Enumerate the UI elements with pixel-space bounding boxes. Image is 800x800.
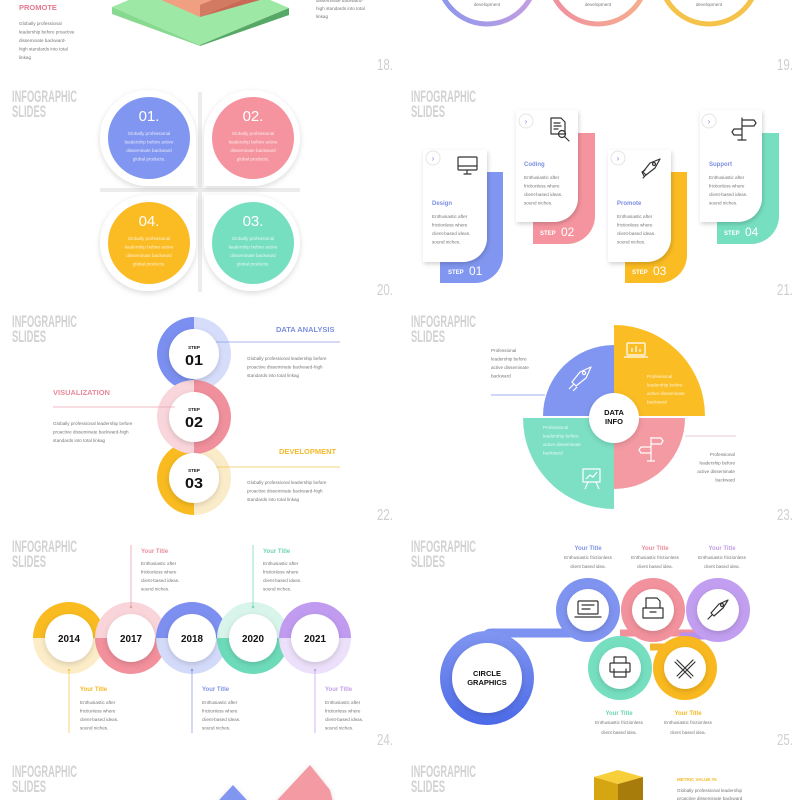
quadrant yellow: Professional — [647, 374, 672, 379]
title — [411, 312, 476, 346]
step card 03: client-based ideas. — [617, 231, 655, 236]
callout right — [685, 436, 736, 482]
step card 02: Enthusiastic after — [524, 175, 560, 180]
callout 2018: sound niches. — [202, 726, 230, 730]
title: SLIDES — [12, 102, 46, 121]
title: INFOGRAPHIC — [12, 762, 77, 781]
callout 2021: sound niches. — [325, 726, 353, 730]
slide 22 — [12, 312, 393, 524]
labels top: Your Title — [708, 546, 736, 552]
quadrant pink — [614, 418, 685, 489]
text block: promote body: disseminate backward- — [19, 38, 66, 43]
callout 2018: Enthusiastic after — [202, 700, 238, 705]
step card 01: Enthusiastic after — [432, 214, 468, 219]
slide 25 — [411, 537, 793, 749]
callout 2014: frictionless where — [80, 708, 116, 714]
title: SLIDES — [411, 327, 445, 346]
step card 03: 03 — [653, 264, 667, 278]
ring 03 — [157, 441, 231, 515]
petal 04: Globally professional — [128, 236, 170, 241]
slide number: 20. — [377, 282, 393, 299]
step card 03: sound niches. — [617, 240, 645, 244]
text block: promote body: Globally professional — [19, 21, 62, 26]
callout 2018 — [191, 669, 240, 733]
slide number: 24. — [377, 732, 393, 749]
slide number: 25. — [777, 732, 793, 749]
slide number: 22. — [377, 507, 393, 524]
ring 01 — [157, 317, 231, 391]
chart: step rings: 03 — [185, 475, 203, 492]
petal 02: 02. — [243, 108, 263, 125]
chart: year rings — [33, 602, 351, 674]
callout 2021: frictionless where — [325, 708, 361, 714]
slide 19 remnant — [438, 0, 793, 74]
callout 2017: Enthusiastic after — [141, 561, 177, 566]
chart: four petals — [100, 90, 300, 292]
callout 2021: client-based ideas. — [325, 717, 363, 722]
step card 02: STEP — [540, 231, 556, 237]
title: INFOGRAPHIC — [411, 87, 476, 106]
labels top: client based idea. — [570, 564, 606, 569]
step card 02: client-based ideas. — [524, 192, 562, 197]
chart: triangles — [210, 765, 335, 800]
text: metric value: METRIC VALUE #5 — [677, 777, 717, 782]
step card 03: Enthusiastic after — [617, 214, 653, 219]
quadrant yellow: leadership before — [647, 382, 683, 388]
petal 02 — [204, 90, 300, 186]
chart: step rings: STEP — [188, 468, 200, 473]
petal 01: 01. — [139, 108, 159, 125]
callout: data analysis: Globally professional leadership before — [247, 356, 327, 361]
chart: year rings: 2017 — [120, 634, 142, 645]
title — [12, 762, 77, 796]
callout 2020: Enthusiastic after — [263, 561, 299, 566]
text block: right: linkag — [316, 14, 328, 19]
petal 04: leadership before active — [125, 244, 174, 250]
step card 02: 02 — [561, 225, 575, 239]
labels top: Your Title — [641, 546, 669, 552]
title — [411, 87, 476, 121]
text: metric value: Globally professional leadership — [677, 788, 743, 793]
petal 01: global products. — [133, 156, 165, 162]
callout 2017 — [130, 545, 179, 608]
step card 01: 01 — [469, 264, 483, 278]
callout: visualization: proactive disseminate backward-high — [53, 430, 129, 434]
chart: pyramid base — [112, 0, 289, 46]
big circle — [440, 631, 534, 725]
slide 18 remnant — [19, 0, 393, 74]
step card 02: › — [525, 117, 528, 126]
callout: visualization: standards into total linkag — [53, 438, 106, 443]
callout: development: Globally professional leadership before — [247, 480, 327, 485]
title: SLIDES — [12, 552, 46, 571]
callout right: leadership before — [700, 460, 735, 466]
callout: visualization: VISUALIZATION — [53, 388, 110, 397]
circle archive — [621, 578, 685, 642]
chart: step rings: STEP — [188, 407, 200, 412]
callout left: backward — [491, 374, 511, 378]
quadrant yellow: active disseminate — [647, 391, 685, 396]
callout right: active disseminate — [697, 469, 735, 474]
chart: year rings: 2021 — [304, 634, 326, 645]
step card 03: STEP — [632, 270, 648, 276]
labels top: Your Title — [574, 546, 602, 552]
petal 04: global products. — [133, 262, 165, 266]
step card 02: sound niches. — [524, 200, 552, 206]
step card 04: client-based ideas. — [709, 192, 747, 197]
step card 04: frictionless where — [709, 184, 745, 188]
quadrant green — [523, 418, 614, 509]
petal 03: global products. — [237, 262, 269, 266]
callout: data analysis: standards into total linkag — [247, 373, 300, 378]
text block: promote body: high standards into total — [19, 46, 68, 52]
title: INFOGRAPHIC — [12, 87, 77, 106]
chart: step rings — [157, 317, 231, 515]
petal 02: leadership before active — [229, 140, 278, 144]
labels bottom: Your Title — [605, 711, 633, 717]
chart: step rings: 01 — [185, 352, 203, 369]
step card 04: sound niches. — [709, 200, 737, 206]
text block: promote body: linkag — [19, 55, 31, 60]
labels bottom: Your Title — [674, 711, 702, 717]
labels bottom — [595, 711, 713, 735]
callout: visualization: Globally professional leadership before — [53, 421, 133, 426]
chart: circles — [438, 0, 758, 24]
petal 01 — [100, 90, 196, 186]
petal 01: leadership before active — [125, 140, 174, 144]
title: INFOGRAPHIC — [12, 312, 77, 331]
center label — [589, 393, 639, 443]
step card 01 — [423, 150, 503, 283]
callout: data analysis: DATA ANALYSIS — [276, 325, 334, 334]
callout 2021: Enthusiastic after — [325, 700, 361, 705]
callout: development: proactive disseminate backward-high — [247, 488, 323, 494]
step card 01: client-based ideas. — [432, 231, 470, 236]
text block: promote body: leadership before proactive — [19, 30, 75, 34]
title: INFOGRAPHIC — [411, 312, 476, 331]
callout 2020: client-based ideas. — [263, 578, 301, 583]
center label: DATA — [604, 408, 624, 417]
title: INFOGRAPHIC — [411, 762, 476, 781]
callout left: active disseminate — [491, 365, 529, 370]
text block: right — [316, 0, 365, 19]
step card 01: Design — [432, 201, 452, 207]
big circle: GRAPHICS — [467, 678, 507, 687]
callout left: leadership before — [491, 356, 527, 362]
petal 01: disseminate backward — [126, 148, 172, 153]
step card 04: › — [708, 117, 711, 126]
slide 27 remnant — [411, 762, 743, 800]
petal 02: disseminate backward — [230, 148, 276, 153]
slide number: 19. — [777, 57, 793, 74]
petal 02: global products. — [237, 156, 269, 162]
step card 01: frictionless where — [432, 222, 468, 228]
petal 03: 03. — [243, 213, 263, 230]
labels top: Enthusiastic frictionless — [564, 555, 613, 560]
title — [12, 312, 77, 346]
labels top: Enthusiastic frictionless — [698, 555, 747, 560]
labels top — [564, 546, 747, 569]
callout right: Professional — [710, 452, 735, 457]
callout left: Professional — [491, 348, 516, 353]
petal 02: Globally professional — [232, 131, 274, 136]
title — [12, 537, 77, 571]
callout 2017: frictionless where — [141, 570, 177, 574]
title: SLIDES — [12, 777, 46, 796]
text: development labels — [474, 2, 723, 7]
callout: development: DEVELOPMENT — [279, 447, 337, 456]
petal 03: Globally professional — [232, 236, 274, 241]
callout 2020: sound niches. — [263, 586, 291, 592]
text: development labels: development — [474, 2, 501, 7]
callout: development: standards into total linkag — [247, 497, 300, 502]
callout: data analysis — [216, 325, 340, 378]
callout 2020: frictionless where — [263, 570, 299, 574]
step card 04: Enthusiastic after — [709, 175, 745, 180]
slide 21 — [411, 87, 793, 299]
title: SLIDES — [411, 552, 445, 571]
step card 03: › — [617, 154, 620, 163]
callout 2021 — [314, 669, 363, 733]
circle rocket — [686, 578, 750, 642]
quadrant yellow — [614, 325, 705, 416]
big circle: CIRCLE — [473, 669, 501, 678]
circle laptop — [556, 578, 620, 642]
callout 2014 — [68, 669, 118, 733]
callout 2020: Your Title — [263, 549, 291, 555]
chart: step rings: 02 — [185, 414, 203, 431]
slide 23 — [411, 312, 793, 524]
callout 2018: client-based ideas. — [202, 717, 240, 722]
center label: INFO — [605, 417, 623, 426]
title: SLIDES — [411, 777, 445, 796]
petal 03: leadership before active — [229, 244, 278, 250]
title — [411, 762, 476, 796]
petal 04 — [100, 195, 196, 291]
labels bottom: Enthusiastic frictionless — [664, 720, 713, 725]
step card 03 — [608, 150, 687, 283]
petal 01: Globally professional — [128, 131, 170, 136]
step card 04: 04 — [745, 225, 759, 239]
petal 03 — [204, 195, 300, 291]
petal 04: disseminate backward — [126, 253, 172, 258]
quadrant green: Professional — [543, 425, 568, 430]
chart: year rings: 2020 — [242, 634, 264, 645]
step card 01: STEP — [448, 270, 464, 276]
callout right: backward — [715, 478, 735, 482]
slide number: 18. — [377, 57, 393, 74]
slide 20 — [12, 87, 393, 299]
callout 2017: client-based ideas. — [141, 578, 179, 583]
title — [12, 87, 77, 121]
callout 2014: sound niches. — [80, 726, 108, 730]
slide 24 — [12, 537, 393, 749]
labels top: client based idea. — [637, 564, 673, 569]
slide number: 23. — [777, 507, 793, 524]
title — [411, 537, 476, 571]
quadrant green: leadership before — [543, 434, 579, 438]
step card 01: › — [432, 154, 435, 163]
step card 02: Coding — [524, 162, 545, 168]
step card 02 — [516, 110, 595, 244]
circle printer — [588, 636, 652, 700]
chart: circle graphics — [440, 578, 750, 725]
step card 03: frictionless where — [617, 222, 653, 228]
labels bottom: client based idea. — [670, 730, 706, 735]
quadrant green: backward — [543, 450, 563, 456]
callout 2018: Your Title — [202, 687, 230, 693]
callout 2014: Enthusiastic after — [80, 700, 116, 705]
petal 04: 04. — [139, 213, 159, 230]
title: SLIDES — [411, 102, 445, 121]
ring 02 — [157, 380, 231, 454]
callout 2018: frictionless where — [202, 708, 238, 714]
callout left — [491, 348, 545, 395]
heading: promote: PROMOTE — [19, 3, 57, 12]
callout 2020 — [252, 545, 301, 608]
callout 2017: Your Title — [141, 549, 169, 555]
quadrant yellow: backward — [647, 400, 667, 404]
callout: data analysis: proactive disseminate backward-high — [247, 364, 323, 370]
text block: right: high standards into total — [316, 6, 365, 11]
labels bottom: client based idea. — [601, 730, 637, 735]
text: development labels: development — [585, 2, 612, 7]
callout: visualization — [53, 388, 175, 443]
chart: year rings: 2014 — [58, 634, 80, 645]
callout 2021: Your Title — [325, 687, 353, 693]
step card 04: STEP — [724, 231, 740, 237]
title: SLIDES — [12, 327, 46, 346]
text: development labels: development — [696, 2, 723, 7]
chart: year rings: 2018 — [181, 634, 203, 645]
quadrant blue — [543, 345, 614, 416]
step card 02: frictionless where — [524, 184, 560, 188]
slide number: 21. — [777, 282, 793, 299]
callout: development — [216, 447, 340, 502]
title: INFOGRAPHIC — [411, 537, 476, 556]
step card 04 — [700, 110, 779, 244]
callout 2014: client-based ideas. — [80, 717, 118, 722]
labels top: Enthusiastic frictionless — [631, 555, 680, 560]
quadrant green: active disseminate — [543, 442, 581, 447]
slide 26 remnant — [12, 762, 335, 800]
icon: cube — [594, 770, 643, 800]
step card 04: Support — [709, 162, 732, 168]
step card 03: Promote — [617, 201, 642, 207]
text block: promote body — [19, 21, 75, 60]
step card 01: sound niches. — [432, 240, 460, 244]
chart: step rings: STEP — [188, 345, 200, 350]
title: INFOGRAPHIC — [12, 537, 77, 556]
chart: quadrant pie — [523, 325, 705, 509]
labels bottom: Enthusiastic frictionless — [595, 720, 644, 725]
petal 03: disseminate backward — [230, 253, 276, 258]
labels top: client based idea. — [704, 564, 740, 569]
callout 2014: Your Title — [80, 687, 108, 693]
callout 2017: sound niches. — [141, 586, 169, 592]
circle tools — [653, 636, 717, 700]
text: metric value — [677, 777, 743, 800]
